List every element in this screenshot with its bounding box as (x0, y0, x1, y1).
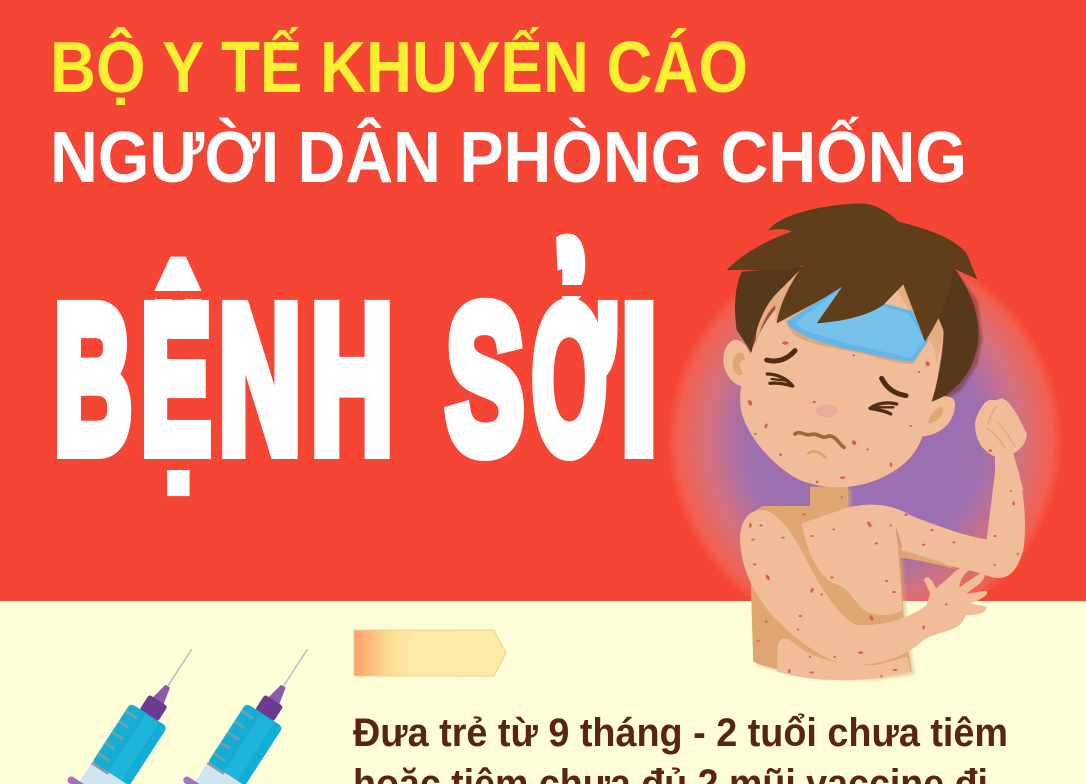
title line 2: NGƯỜI DÂN PHÒNG CHỐNG (50, 116, 967, 198)
rash spots on body (749, 490, 1019, 678)
main heading: BỆNH SỞI: Ệ (141, 264, 211, 496)
illustration: sick child with rash (723, 203, 1027, 681)
face (740, 290, 944, 487)
main heading: BỆNH SỞI: Ở (532, 264, 614, 496)
advice text: Đưa trẻ từ 9 tháng - 2 tuổi chưa tiêm (353, 711, 1008, 755)
hair front (727, 203, 977, 342)
nose (816, 405, 838, 417)
main heading: BỆNH SỞI: Ở (532, 243, 614, 545)
icon: syringe right (182, 631, 335, 784)
main heading: BỆNH SỞI: H (311, 264, 393, 496)
rash spots on face (747, 341, 931, 483)
child's head with cooling patch (723, 203, 1027, 490)
purple fever glow behind the child (670, 266, 1060, 601)
background: red header panel (0, 0, 1086, 601)
ears (723, 340, 955, 437)
forehead shade (756, 266, 944, 363)
child's body and arms (740, 470, 1025, 681)
main heading: BỆNH SỞI: I (621, 264, 657, 496)
hair back (735, 267, 979, 402)
main heading: BỆNH SỞI: B (54, 264, 132, 496)
advice text (353, 711, 1008, 784)
main heading: BỆNH SỞI: S (446, 264, 524, 496)
section tag: arrow label (354, 630, 506, 676)
raised fist (975, 398, 1027, 490)
cooling gel patch (786, 285, 928, 364)
main heading: BỆNH SỞI: N (219, 264, 301, 496)
icon: syringe left (66, 631, 220, 784)
hair shadow (739, 272, 982, 406)
title line 1: BỘ Y TẾ KHUYẾN CÁO (50, 27, 748, 108)
main heading: BỆNH SỞI (57, 234, 654, 496)
eyes, eyebrows and mouth (767, 351, 906, 457)
